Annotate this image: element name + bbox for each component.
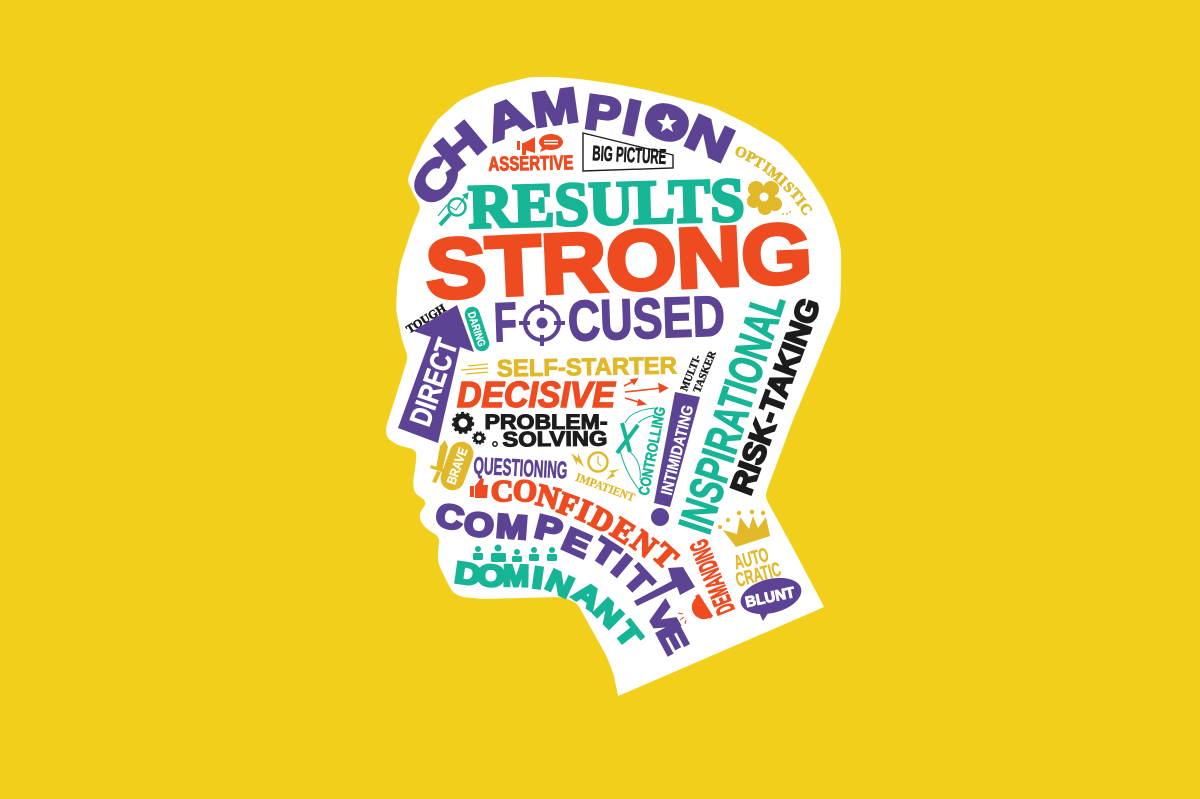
word: CHAMPION: P bbox=[582, 84, 624, 143]
word: OPTIMISTIC: P bbox=[743, 149, 758, 167]
word: AUTO CRATIC bbox=[732, 544, 784, 592]
word: COMPETITIVE with gavel: E bbox=[557, 520, 596, 565]
word: CHAMPION: I bbox=[618, 90, 645, 146]
word: CONFIDENT: F bbox=[553, 485, 583, 524]
word: CONTROLLING: CONTROLLING bbox=[636, 405, 669, 497]
arrows: decisive directions bbox=[624, 379, 667, 405]
word: CONFIDENT: N bbox=[533, 477, 563, 516]
word: SELF-STARTER: SELF-STARTER bbox=[497, 352, 677, 383]
word: DOMINANT: T bbox=[608, 616, 648, 654]
word: STRONG: STRONG bbox=[424, 206, 814, 316]
word: ASSERTIVE: ASSERTIVE bbox=[488, 152, 574, 176]
icon: people bbox=[473, 544, 557, 562]
word: OPTIMISTIC: M bbox=[764, 164, 785, 185]
icon: bolts and clock bbox=[571, 452, 620, 480]
icon: service bell bbox=[678, 594, 713, 624]
word: COMPETITIVE with gavel: C bbox=[433, 496, 467, 538]
word: DECISIVE: DECISIVE bbox=[457, 374, 616, 415]
word: DOMINANT: D bbox=[453, 556, 483, 593]
word: COMPETITIVE with gavel: T bbox=[585, 530, 626, 575]
word: COMPETITIVE with gavel bbox=[433, 496, 695, 659]
bubble: BLUNT bbox=[737, 572, 805, 621]
arrow: DIRECT: DIRECT bbox=[404, 335, 465, 430]
pill: BRAVE bbox=[437, 438, 477, 494]
word: DOMINANT: M bbox=[503, 558, 529, 593]
word: COMPETITIVE with gavel: V bbox=[640, 597, 686, 640]
word: FOCUSED bbox=[493, 284, 726, 354]
word: OPTIMISTIC bbox=[732, 143, 815, 219]
word: DOMINANT: N bbox=[587, 593, 629, 635]
word: CONFIDENT bbox=[491, 472, 685, 576]
word: CONFIDENT: E bbox=[605, 510, 641, 551]
word: CHAMPION: N bbox=[678, 105, 741, 172]
pill: DARING: DARING bbox=[465, 310, 487, 348]
word: CONFIDENT: N bbox=[625, 523, 664, 564]
word: CHAMPION: H bbox=[426, 112, 495, 181]
word: DEMANDING: DEMANDING bbox=[683, 535, 741, 619]
word: OPTIMISTIC: T bbox=[750, 153, 767, 172]
word: CHAMPION: M bbox=[529, 77, 582, 137]
word: INSPIRATIONAL: INSPIRATIONAL bbox=[668, 287, 795, 539]
icon: gears bbox=[453, 413, 497, 446]
icon: megaphone bbox=[517, 137, 535, 155]
word: FOCUSED: F bbox=[493, 291, 518, 353]
icon: thumbs up bbox=[470, 478, 488, 498]
word: BIG PICTURE in frame bbox=[583, 133, 673, 171]
word: MULTI-TASKER: MULTI- bbox=[678, 353, 704, 393]
word: COMPETITIVE with gavel: P bbox=[532, 507, 566, 550]
word: CHAMPION bbox=[400, 77, 741, 216]
word: RISK-TAKING: RISK-TAKING bbox=[724, 293, 827, 499]
word: MULTI-TASKER: TASKER bbox=[691, 348, 719, 395]
word: RESULTS: RESULTS bbox=[468, 166, 745, 242]
word: OPTIMISTIC: C bbox=[796, 200, 815, 219]
icon: magnifier with rising arrow bbox=[438, 193, 468, 225]
word: DOMINANT: N bbox=[541, 564, 578, 605]
word: AUTO CRATIC: CRATIC bbox=[733, 559, 784, 592]
word: BIG PICTURE in frame: BIG PICTURE bbox=[592, 142, 667, 169]
word: CONFIDENT: D bbox=[584, 499, 620, 540]
icon: speech bubble bbox=[539, 134, 563, 152]
word: FOCUSED: CUSED bbox=[567, 284, 726, 354]
icon: crown bbox=[718, 510, 770, 547]
word: CHAMPION: C bbox=[400, 146, 471, 216]
word: COMPETITIVE with gavel: O bbox=[462, 505, 496, 545]
word: DOMINANT bbox=[453, 556, 648, 654]
pill: BRAVE: BRAVE bbox=[443, 445, 471, 486]
exclamation mark: INTIMIDATING: INTIMIDATING bbox=[659, 404, 697, 497]
exclamation mark: INTIMIDATING bbox=[651, 392, 700, 526]
word: DOMINANT: O bbox=[476, 559, 506, 594]
icon: flower cloud bbox=[747, 181, 791, 215]
word: DOMINANT: A bbox=[567, 575, 607, 617]
word: COMPETITIVE with gavel: T bbox=[617, 559, 660, 602]
word: CHAMPION: O bbox=[637, 91, 696, 155]
word: AUTO CRATIC: AUTO bbox=[732, 544, 771, 574]
bubble: BLUNT: BLUNT bbox=[744, 584, 796, 611]
word: COMPETITIVE with gavel: I bbox=[605, 548, 638, 583]
word: MULTI-TASKER bbox=[678, 348, 719, 395]
icon: tangled strings and cross bbox=[617, 408, 655, 493]
word: CONFIDENT: C bbox=[491, 473, 513, 508]
head silhouette bbox=[386, 77, 841, 696]
word: PROBLEM-SOLVING bbox=[484, 411, 608, 451]
word: CONFIDENT: I bbox=[572, 492, 597, 529]
word: IMPATIENT: IMPATIENT bbox=[574, 470, 637, 504]
word: COMPETITIVE with gavel: E bbox=[650, 617, 695, 659]
word: PROBLEM-SOLVING: SOLVING bbox=[502, 428, 608, 451]
word: OPTIMISTIC: S bbox=[780, 179, 797, 196]
speed lines bbox=[461, 364, 488, 374]
word: CONFIDENT: T bbox=[646, 536, 685, 576]
word: OPTIMISTIC: O bbox=[732, 143, 749, 162]
word: QUESTIONING: QUESTIONING bbox=[473, 453, 568, 484]
word: TOUGH: TOUGH bbox=[404, 301, 449, 336]
word: COMPETITIVE with gavel: M bbox=[495, 507, 529, 546]
word: CONFIDENT: O bbox=[512, 472, 539, 509]
word: CHAMPION: A bbox=[477, 86, 537, 152]
word: PROBLEM-SOLVING: PROBLEM- bbox=[484, 411, 608, 434]
word: OPTIMISTIC: I bbox=[775, 174, 790, 190]
icon: sword bbox=[430, 440, 449, 483]
word: OPTIMISTIC: I bbox=[792, 194, 808, 209]
word: DOMINANT: I bbox=[530, 562, 545, 595]
word: OPTIMISTIC: T bbox=[786, 186, 805, 204]
word: OPTIMISTIC: I bbox=[760, 160, 773, 176]
